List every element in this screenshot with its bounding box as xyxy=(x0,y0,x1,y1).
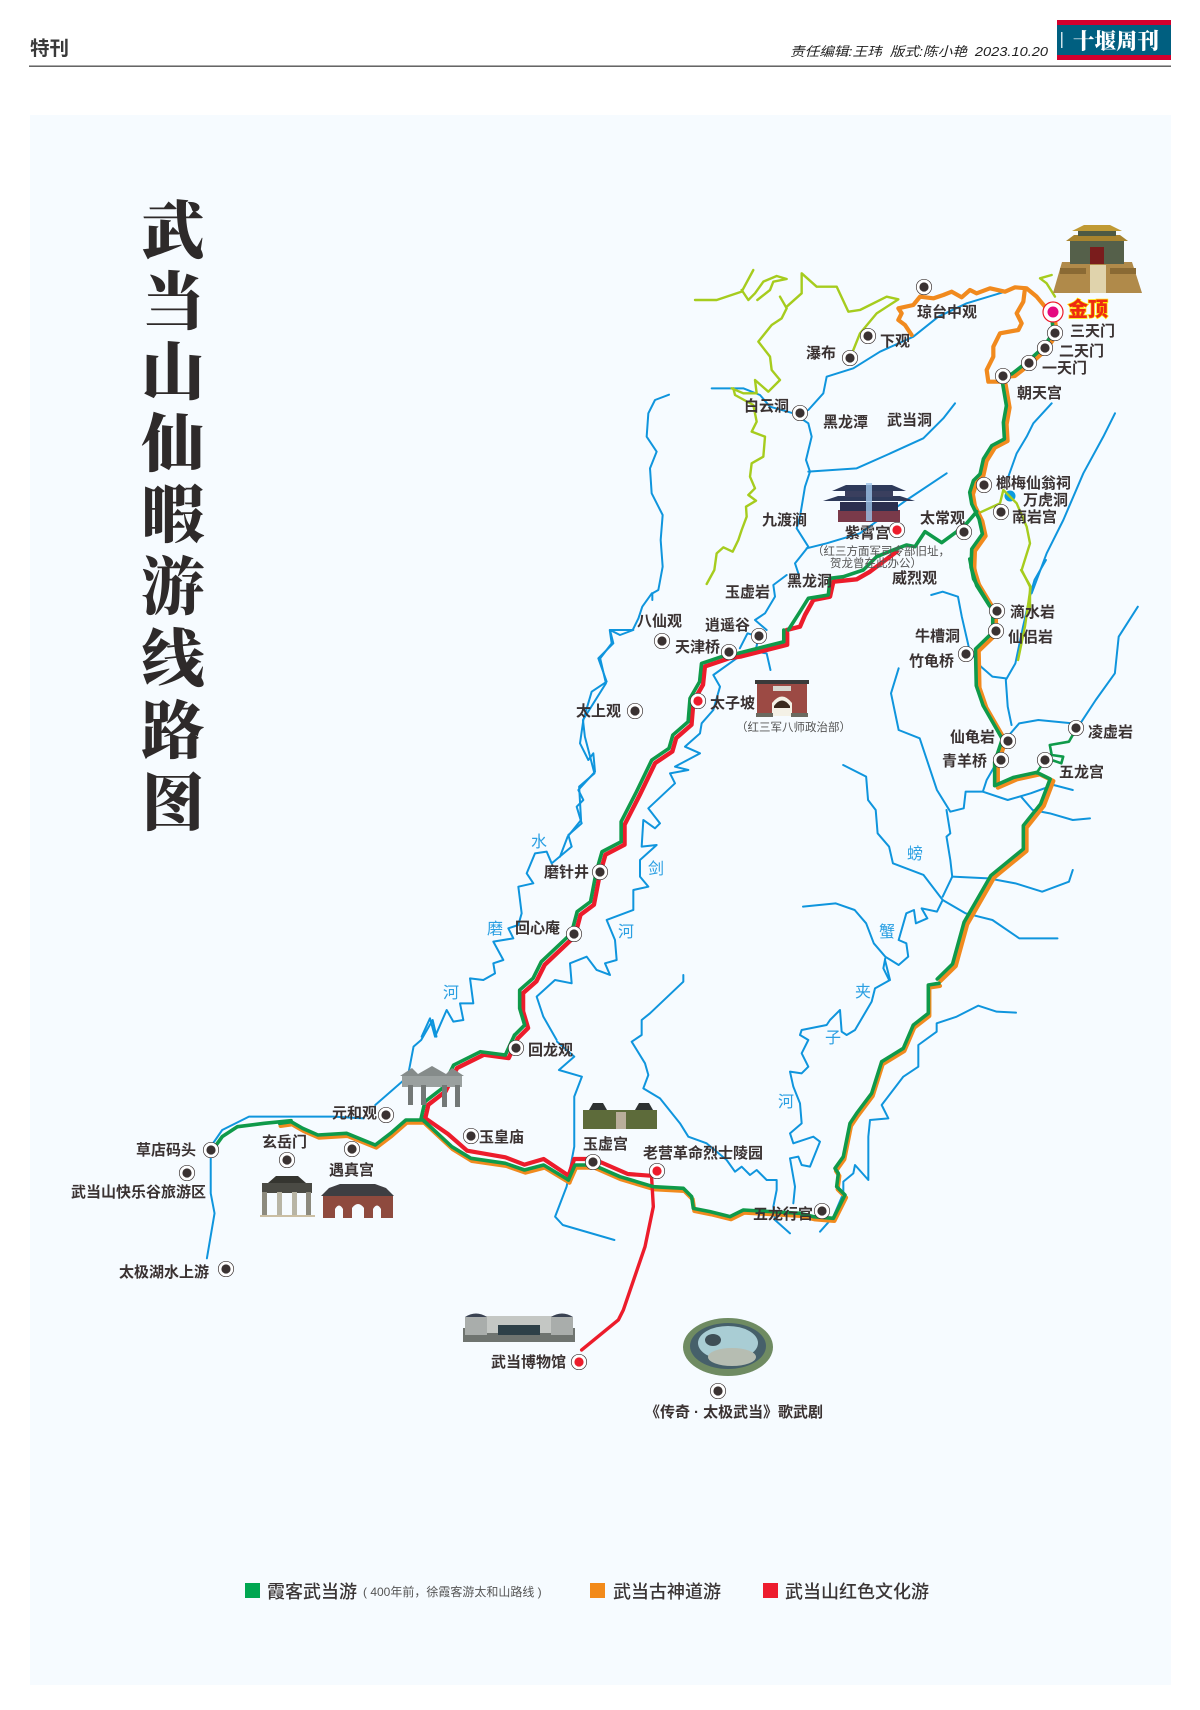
river: lake xyxy=(1004,490,1016,502)
boundary streams xyxy=(695,270,1055,660)
stop: 逍遥谷 xyxy=(705,617,767,644)
stop: 瀑布 xyxy=(806,344,858,366)
label: 玉虚岩: 玉虚岩 xyxy=(725,583,770,601)
label: 牛槽洞: 牛槽洞 xyxy=(915,627,960,645)
stop: 五龙行宫: 五龙行宫 xyxy=(753,1205,813,1223)
stop: 传奇太极武当歌武剧 xyxy=(645,1383,823,1421)
stop: 三天门: 三天门 xyxy=(1070,322,1115,340)
label: 万虎洞: 万虎洞 xyxy=(1023,492,1068,509)
stop: 仙龟岩: 仙龟岩 xyxy=(950,728,995,746)
stop: 回龙观: 回龙观 xyxy=(528,1041,573,1059)
river names: 河 xyxy=(778,1093,794,1111)
river names: 蟹 xyxy=(879,923,895,941)
stop: 太上观 xyxy=(576,703,643,720)
title: 暇 xyxy=(142,481,204,551)
stop: 二天门 xyxy=(1037,340,1104,360)
label: 武当洞: 武当洞 xyxy=(887,411,932,429)
stop: 天津桥 xyxy=(675,638,737,660)
legend xyxy=(245,1582,929,1602)
stop: 遇真宫: 遇真宫 xyxy=(329,1161,374,1179)
stop: 琼台中观: 琼台中观 xyxy=(917,303,977,321)
stop: 紫霄宫 xyxy=(845,522,905,542)
icon: 武当博物馆 building xyxy=(463,1314,575,1342)
stop: 天津桥: 天津桥 xyxy=(675,638,720,656)
river names: 螃 xyxy=(907,845,923,863)
legend: green route: 霞客武当游 xyxy=(267,1582,357,1602)
stop: 玉虚宫 xyxy=(583,1135,628,1170)
river names: 磨 xyxy=(487,920,503,938)
title: 武 xyxy=(142,197,204,267)
route: 武当古神道游 (orange) xyxy=(281,287,1057,1221)
stop: 回心庵: 回心庵 xyxy=(515,919,560,937)
label: 黑龙洞: 黑龙洞 xyxy=(787,572,832,590)
stop: 五龙宫 xyxy=(1037,752,1104,781)
newspaper logo xyxy=(1057,20,1171,60)
stop: 老营革命烈士陵园: 老营革命烈士陵园 xyxy=(643,1144,763,1162)
stop: 榔梅仙翁祠: 榔梅仙翁祠 xyxy=(996,474,1071,492)
river names: 子 xyxy=(825,1029,841,1047)
title: 游 xyxy=(142,553,204,623)
stop: 仙侣岩: 仙侣岩 xyxy=(1008,628,1053,646)
stop: 武当博物馆: 武当博物馆 xyxy=(491,1353,566,1371)
river names xyxy=(443,833,923,1111)
stop: 瀑布: 瀑布 xyxy=(806,344,836,362)
label: 威烈观: 威烈观 xyxy=(892,569,937,587)
stop: 一天门 xyxy=(1021,355,1087,377)
stop: 滴水岩: 滴水岩 xyxy=(1010,603,1055,621)
stop: 二天门: 二天门 xyxy=(1059,342,1104,360)
icon: 玉虚宫 courtyard xyxy=(583,1103,657,1129)
stop: 玉皇庙: 玉皇庙 xyxy=(479,1128,524,1146)
note: 太子坡: （红三军八师政治部） xyxy=(736,720,851,734)
stop: 三天门 xyxy=(1047,322,1115,341)
stop: 磨针井 xyxy=(544,863,608,881)
river names: 河 xyxy=(443,984,459,1002)
stop: 琼台中观 xyxy=(916,279,977,321)
page header xyxy=(29,20,1171,67)
stop: 南岩宫: 南岩宫 xyxy=(1012,508,1057,526)
stop: 太极湖水上游 xyxy=(119,1261,234,1281)
note: 紫霄宫: 贺龙曾在此办公） xyxy=(830,556,922,570)
stop: 竹龟桥: 竹龟桥 xyxy=(909,652,954,670)
stop: 老营革命烈士陵园 xyxy=(643,1144,763,1179)
title: 当 xyxy=(142,268,204,338)
stop: 凌虚岩 xyxy=(1068,720,1133,741)
river names: 河 xyxy=(618,923,634,941)
rivers xyxy=(207,292,1138,1258)
icon: 传奇太极武当 theatre xyxy=(683,1318,773,1376)
title: 图 xyxy=(142,769,204,839)
icon: 金顶 palace xyxy=(1053,225,1142,293)
stop: 回龙观 xyxy=(508,1040,573,1059)
stop: 太常观: 太常观 xyxy=(920,510,965,527)
river names: 夹 xyxy=(855,983,871,1001)
legend: orange route: 武当古神道游 xyxy=(613,1582,721,1602)
route: 霞客武当游 (green) xyxy=(213,311,1077,1218)
legend: green route: ( 400年前，徐霞客游太和山路线 ) xyxy=(363,1584,542,1599)
river names: 剑 xyxy=(648,860,664,878)
stop: 五龙行宫 xyxy=(753,1203,830,1223)
stop: 逍遥谷: 逍遥谷 xyxy=(705,617,750,634)
stop: 太极湖水上游: 太极湖水上游 xyxy=(119,1263,209,1281)
stop: 下观: 下观 xyxy=(880,333,910,350)
stop: 金顶 xyxy=(1043,297,1108,322)
stop: 太子坡: 太子坡 xyxy=(710,695,755,712)
title: 山 xyxy=(142,338,204,408)
icon: 遇真宫 hall xyxy=(321,1184,394,1218)
stop: 回心庵 xyxy=(515,919,582,942)
stop: 滴水岩 xyxy=(989,603,1055,621)
stop: 武当山快乐谷旅游区 xyxy=(71,1165,206,1201)
editor credits: 责任编辑:王玮 版式:陈小艳 2023.10.20 xyxy=(790,44,1049,59)
stop: 下观 xyxy=(860,328,910,350)
stop: 武当山快乐谷旅游区: 武当山快乐谷旅游区 xyxy=(71,1183,206,1201)
title: 仙 xyxy=(142,410,204,480)
icon: 紫霄宫 hall xyxy=(823,483,915,522)
legend: red route: 武当山红色文化游 xyxy=(785,1582,929,1602)
stop: 白云洞: 白云洞 xyxy=(744,397,789,415)
stop: 元和观: 元和观 xyxy=(332,1105,377,1122)
stop: 五龙宫: 五龙宫 xyxy=(1059,763,1104,781)
stop: 传奇太极武当歌武剧: 《传奇 · 太极武当》歌武剧 xyxy=(645,1403,823,1421)
stop: 南岩宫 xyxy=(993,504,1057,526)
stop: 仙龟岩 xyxy=(950,728,1016,749)
stop: 八仙观: 八仙观 xyxy=(637,613,682,630)
legend: green route xyxy=(245,1582,542,1602)
stop: 遇真宫 xyxy=(329,1141,374,1179)
route: 武当山红色文化游 (red) xyxy=(423,552,897,1350)
stops xyxy=(71,279,1133,1421)
stop: 金顶: 金顶 xyxy=(1068,297,1108,321)
stop: 竹龟桥 xyxy=(909,646,974,670)
river names: 水 xyxy=(531,833,547,851)
stop: 青羊桥 xyxy=(942,752,1009,770)
stop: 青羊桥: 青羊桥 xyxy=(942,752,987,770)
stop: 玄岳门: 玄岳门 xyxy=(262,1133,307,1151)
stop: 八仙观 xyxy=(637,613,682,649)
stop: 仙侣岩 xyxy=(988,623,1053,646)
label: 九渡涧: 九渡涧 xyxy=(762,511,807,529)
stop: 太子坡 xyxy=(690,693,755,712)
stop: 玉虚宫: 玉虚宫 xyxy=(583,1135,628,1153)
note: 紫霄宫 xyxy=(812,544,950,570)
label: 黑龙潭: 黑龙潭 xyxy=(823,413,868,431)
stop: 太常观 xyxy=(920,510,972,540)
stop: 紫霄宫: 紫霄宫 xyxy=(845,524,890,542)
title: 线 xyxy=(142,625,204,695)
stop: 朝天宫 xyxy=(995,368,1062,402)
note: 紫霄宫: （红三方面军司令部旧址， xyxy=(812,544,950,558)
icon: 玄岳门 archway xyxy=(260,1176,315,1217)
stop: 玄岳门 xyxy=(262,1133,307,1168)
stop: 草店码头: 草店码头 xyxy=(136,1142,196,1159)
newspaper logo: 十堰周刊 xyxy=(1073,29,1159,54)
stop: 一天门: 一天门 xyxy=(1042,359,1087,377)
stop: 朝天宫: 朝天宫 xyxy=(1017,384,1062,402)
icon: 元和观 stone arch xyxy=(400,1066,464,1107)
title: 路 xyxy=(142,697,204,767)
stop: 凌虚岩: 凌虚岩 xyxy=(1088,723,1133,741)
stop: 磨针井: 磨针井 xyxy=(544,863,589,881)
icon: 太子坡 red gate xyxy=(755,680,809,717)
stop: 白云洞 xyxy=(744,397,808,421)
section label: 特刊 xyxy=(30,38,69,60)
stop: 太上观: 太上观 xyxy=(576,703,621,720)
title xyxy=(142,197,204,839)
